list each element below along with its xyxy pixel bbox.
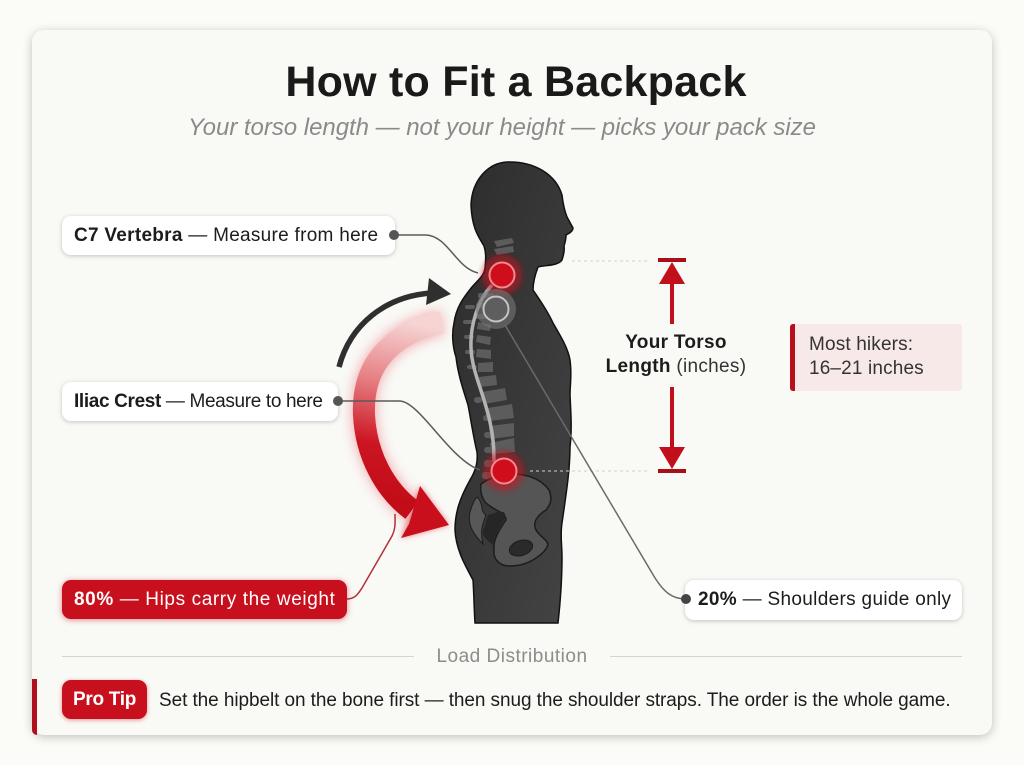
reference dashed lines [530, 261, 650, 471]
label: 80 percent hips [62, 580, 347, 619]
callout: most hikers: 16–21 inches [809, 358, 924, 379]
c7 marker [482, 255, 522, 295]
label: 80 percent hips: 80% — Hips carry the weight [74, 589, 335, 610]
divider left [62, 656, 414, 657]
label: c7 vertebra: C7 Vertebra — Measure from here [74, 225, 378, 246]
pro tip badge [62, 680, 147, 719]
pro tip text: Set the hipbelt on the bone first — then snug the shoulder straps. The order is the whole game. [159, 690, 951, 711]
callout: most hikers: Most hikers: [809, 334, 913, 355]
divider right [610, 656, 962, 657]
title: How to Fit a Backpack [285, 58, 747, 106]
leader: shoulders [505, 325, 686, 599]
subtitle: Your torso length — not your height — picks your pack size [188, 114, 816, 141]
pro tip badge: Pro Tip [73, 689, 136, 710]
label: your torso length: Your Torso [625, 332, 727, 353]
spinal cord line [471, 285, 494, 462]
label: 20 percent shoulders: 20% — Shoulders guide only [698, 589, 951, 610]
label: iliac crest [62, 382, 338, 421]
body silhouette [453, 162, 573, 623]
leader: iliac crest [338, 401, 480, 470]
pelvis [469, 474, 551, 566]
label: your torso length: Length (inches) [606, 356, 746, 377]
pro tip accent bar [32, 679, 37, 735]
red arrow: hips [364, 322, 449, 538]
label: your torso length [606, 332, 746, 377]
torso measurement arrows [658, 258, 686, 473]
label: 20 percent shoulders [685, 580, 962, 620]
iliac crest marker [484, 451, 524, 491]
leader: hips [347, 514, 395, 599]
caption: load distribution: Load Distribution [436, 646, 588, 667]
callout: most hikers [790, 324, 962, 391]
label: iliac crest: Iliac Crest — Measure to here [74, 391, 323, 412]
leader: c7 [394, 235, 478, 273]
shoulder marker [476, 289, 516, 329]
spine vertebrae [463, 238, 515, 479]
label: c7 vertebra [62, 216, 395, 255]
dark arrow: shoulders [339, 278, 451, 367]
